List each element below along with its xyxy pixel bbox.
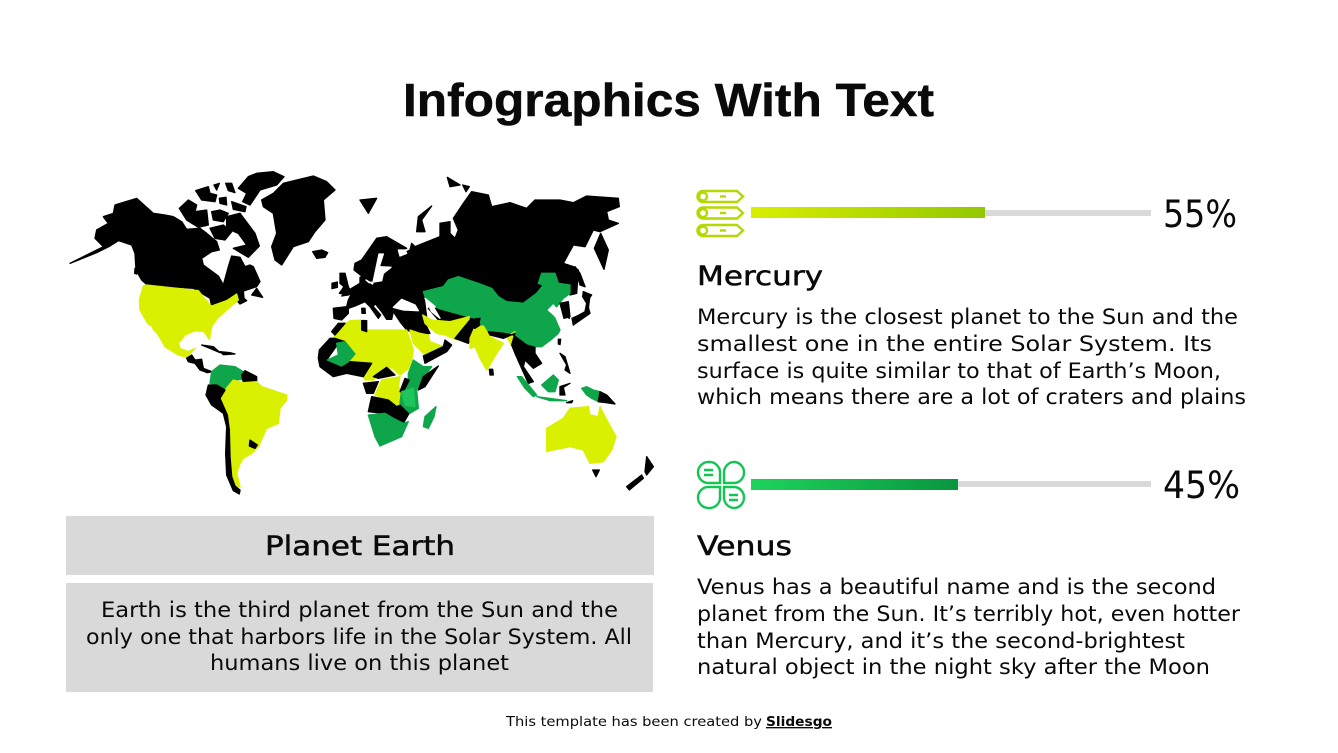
text: Venus description: natural object in the night sky after the Moon (697, 655, 1210, 679)
progress bar: Venus 45% (751, 479, 1151, 490)
world map (70, 172, 653, 494)
title: Infographics With Text (403, 74, 934, 126)
icon: Venus clover (698, 462, 744, 508)
map: South and Central America (187, 345, 287, 494)
value: 55%: 55% (1163, 193, 1237, 236)
footer credit: Slidesgo (766, 714, 832, 730)
icon: Mercury tags (698, 191, 743, 236)
text: Mercury description: which means there are a lot of craters and plains (697, 385, 1246, 409)
map: India and South-East Asia (470, 273, 590, 383)
text: Venus description: Venus has a beautiful name and is the second (697, 575, 1216, 599)
panel: Planet Earth description: humans live on this planet (210, 651, 509, 675)
footer credit: This template has been created by (505, 714, 762, 730)
map: USA and Mexico (139, 285, 238, 357)
map: Africa and the Middle East (318, 308, 480, 446)
panel: Planet Earth heading: Planet Earth (265, 531, 455, 562)
text: Venus description (697, 575, 1240, 679)
heading: Mercury: Mercury (697, 261, 823, 292)
text: Mercury description: surface is quite similar to that of Earth’s Moon, (697, 359, 1221, 383)
map: North America, Canada and Greenland (70, 172, 335, 306)
text: Mercury description (697, 305, 1246, 409)
text: Venus description: planet from the Sun. It’s terribly hot, even hotter (697, 602, 1240, 626)
heading: Venus: Venus (697, 531, 792, 562)
text: Venus description: than Mercury, and it’s the second-brightest (697, 629, 1185, 653)
text: Mercury description: Mercury is the closest planet to the Sun and the (697, 305, 1238, 329)
panel: Planet Earth heading (66, 516, 654, 575)
map: Eurasia (332, 177, 619, 347)
value: 45%: 45% (1163, 464, 1240, 507)
text: Mercury description: smallest one in the entire Solar System. Its (697, 332, 1212, 356)
progress bar: Mercury 55% (751, 207, 1151, 218)
map: Indonesia, Australia and New Zealand (517, 375, 653, 490)
panel: Planet Earth description (66, 583, 653, 692)
panel: Planet Earth description: Earth is the third planet from the Sun and the (101, 598, 618, 622)
panel: Planet Earth description: only one that harbors life in the Solar System. All (86, 625, 632, 649)
